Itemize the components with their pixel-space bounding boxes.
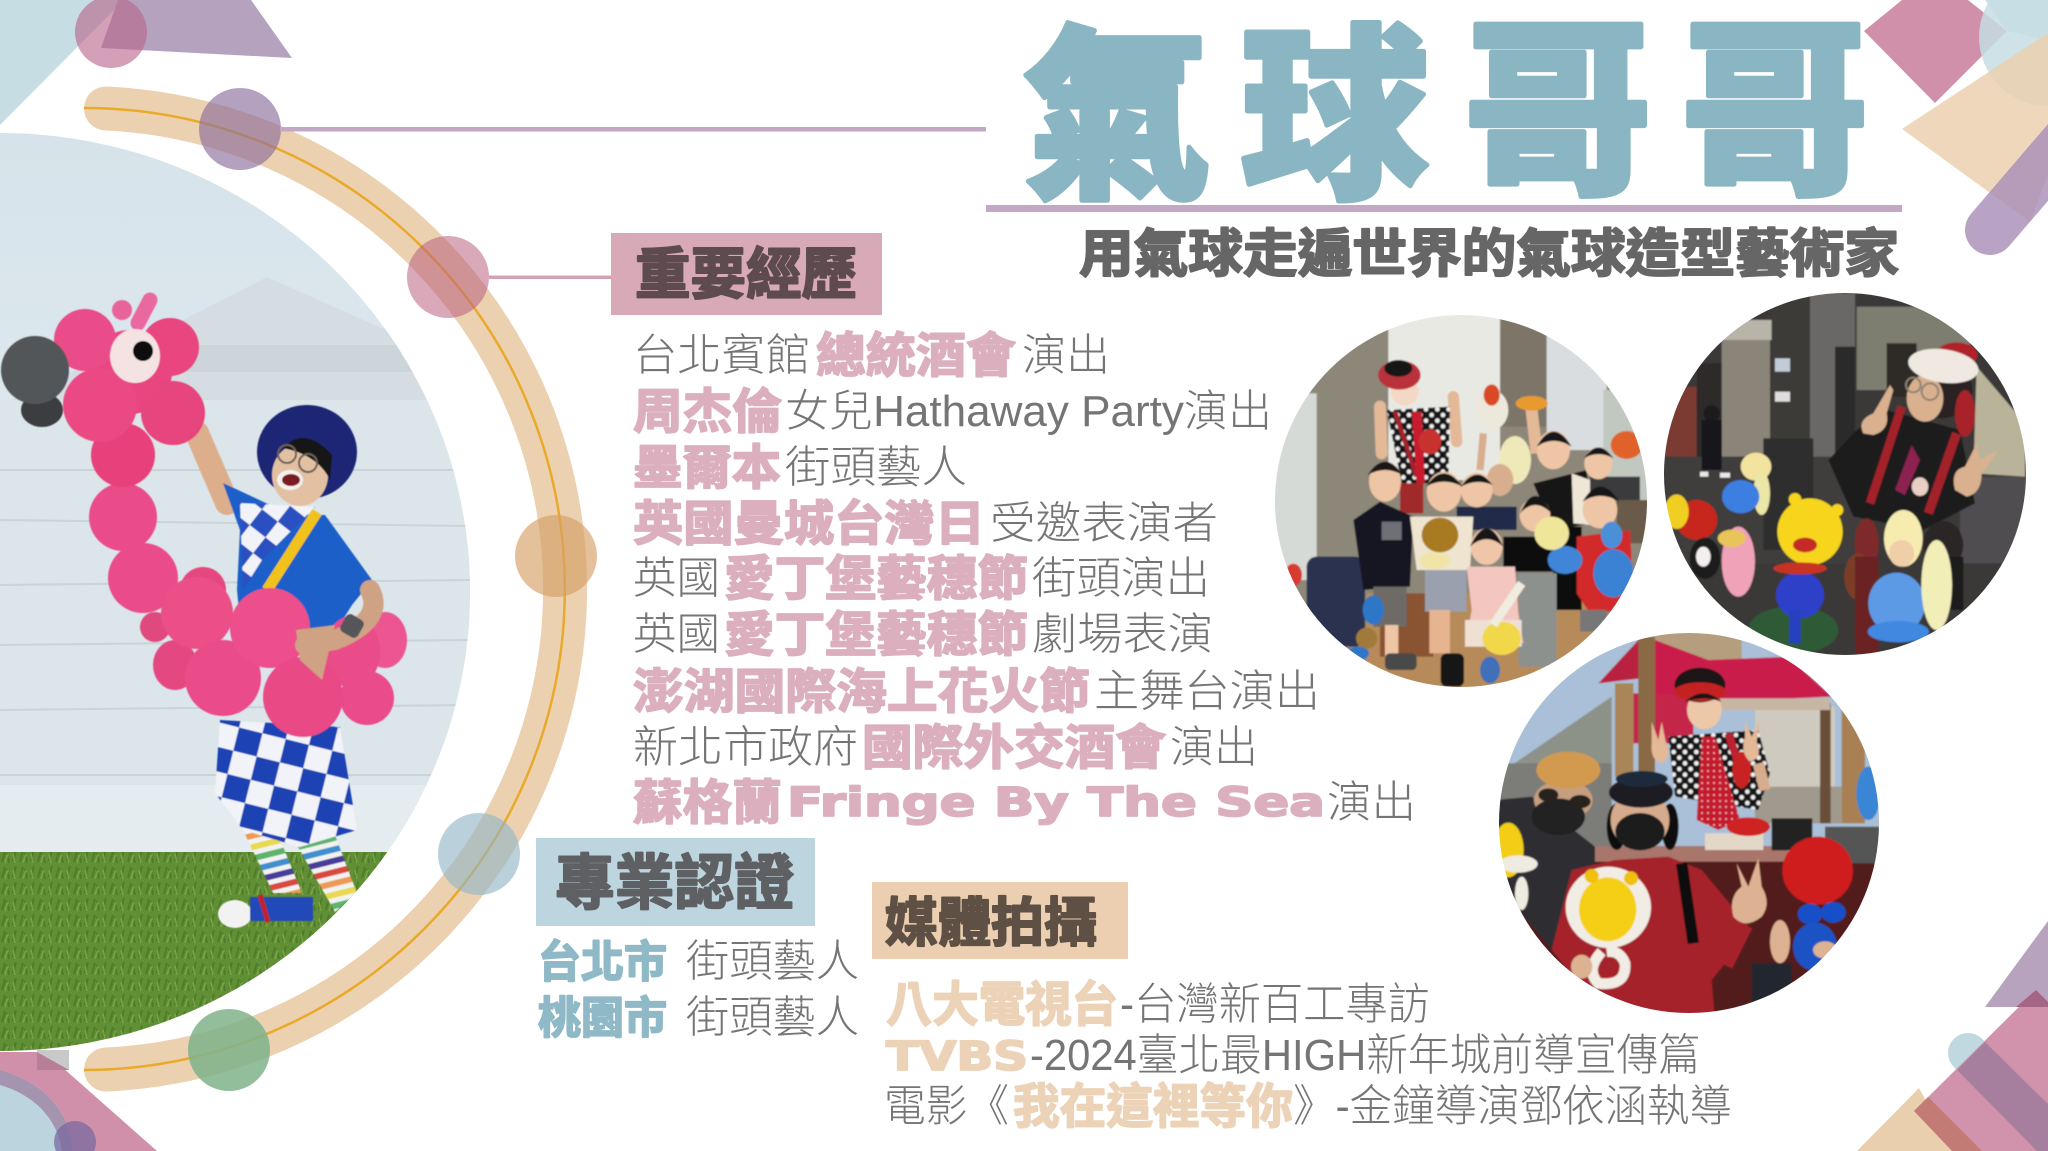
grass: [0, 852, 388, 1051]
title: 哥: [1681, 9, 1869, 219]
cert line 2: 街頭藝人: [686, 993, 859, 1042]
title: [1023, 9, 1869, 223]
performer: [1828, 410, 1975, 530]
line 5: 愛丁堡藝穗節: [724, 553, 1028, 606]
photo: santa hat performer at night: [1660, 290, 2030, 660]
line 8: 新北市政府: [633, 723, 858, 772]
timeline dot: purple: [199, 88, 281, 170]
line 1: [633, 330, 1110, 383]
title underline: [986, 205, 1902, 212]
balloons: [1676, 500, 1717, 540]
line 9: 演出: [1327, 778, 1416, 827]
blue shirt: [223, 483, 372, 640]
timeline dot: blue: [438, 813, 520, 895]
media line 3: 》-金鐘導演鄧依涵執導: [1293, 1082, 1732, 1131]
peace hands: [1861, 385, 1893, 435]
line 9: 蘇格蘭: [633, 777, 782, 830]
title: 氣: [1023, 13, 1211, 223]
kid with black top: [1503, 537, 1553, 572]
pedestrian: [1704, 406, 1720, 420]
decoration: bottom-left shapes: [0, 1050, 157, 1151]
photo: group with children: [1270, 310, 1652, 693]
certification list: [538, 937, 859, 1043]
heading: key experience: 重要經歷: [635, 243, 857, 306]
balloon figures upper: [1482, 392, 1510, 428]
line 6: [633, 609, 1213, 662]
dark umbrella: [1854, 517, 1880, 558]
heading: key experience: [611, 233, 882, 315]
media list: [884, 979, 1732, 1134]
line 9: Fringe By The Sea: [787, 780, 1325, 826]
line 6: 英國: [633, 610, 720, 659]
kid right: [1577, 530, 1632, 613]
line 8: 演出: [1170, 723, 1258, 772]
heading: professional certification: 專業認證: [555, 850, 794, 917]
timeline dot: pink: [407, 236, 489, 318]
heading: media: 媒體拍攝: [885, 894, 1097, 953]
suspender: [267, 512, 317, 590]
cert line 2: [538, 993, 859, 1043]
tent roof: [12, 278, 427, 400]
line 4: 受邀表演者: [990, 499, 1218, 548]
kid in raglan: [1533, 470, 1592, 530]
yellow balloon left: [1493, 823, 1524, 877]
girl: [1465, 567, 1523, 647]
back kids: [1480, 433, 1483, 470]
cert line 1: 台北市: [538, 938, 667, 987]
line 1: 總統酒會: [816, 330, 1016, 383]
line 3: [633, 442, 967, 495]
line 7: 澎湖國際海上花火節: [633, 666, 1090, 719]
peace hand: [1732, 858, 1767, 923]
cert line 1: [538, 937, 859, 987]
connector line to experience heading: [489, 276, 612, 279]
photo: balloon artist with pink balloon animal: [0, 130, 480, 1062]
media line 3: 電影《: [884, 1082, 1009, 1131]
line 1: 台北賓館: [633, 331, 810, 380]
balloon head: [1, 300, 205, 445]
media line 1: 八大電視台: [886, 979, 1118, 1032]
child head: [1924, 521, 1964, 558]
heading: media: [872, 882, 1128, 959]
legs and shoes: [243, 827, 302, 893]
timeline dot: green: [188, 1009, 270, 1091]
line 8: 國際外交酒會: [862, 722, 1166, 775]
media line 1: -台灣新百工專訪: [1120, 980, 1430, 1029]
title: 球: [1241, 13, 1429, 223]
decoration: top-left shapes: [0, 0, 292, 125]
line 4: [633, 498, 1218, 551]
kid 2: [1410, 517, 1473, 570]
media line 1: [886, 979, 1430, 1032]
hat and face: [257, 405, 357, 499]
media line 3: [884, 1081, 1732, 1134]
box pillar: [1763, 438, 1813, 550]
hand and watch: [305, 590, 373, 645]
line 9: [633, 777, 1416, 830]
line 3: 街頭藝人: [785, 443, 967, 492]
line 7: [633, 666, 1320, 719]
cert line 2: 桃園市: [538, 994, 667, 1043]
center woman: [1552, 857, 1752, 1020]
kid 1: [1353, 502, 1413, 590]
line 5: 街頭演出: [1032, 554, 1210, 603]
subtitle: 用氣球走遍世界的氣球造型藝術家: [1079, 226, 1899, 284]
white sheet backdrop: [0, 480, 470, 785]
performer: [1668, 730, 1770, 810]
line 8: [633, 722, 1258, 775]
arm raised: [197, 433, 227, 503]
green jacket: [1748, 606, 1838, 654]
heading: professional certification: [536, 838, 815, 926]
line 6: 愛丁堡藝穗節: [724, 609, 1028, 662]
scarf: [240, 503, 315, 590]
decoration: top-right shapes: [1864, 0, 2048, 230]
photo: fans with masks and performer at booth: [1493, 630, 1885, 1020]
table: [1513, 860, 1875, 1012]
cert line 1: 街頭藝人: [686, 937, 859, 986]
line 2: 周杰倫: [633, 386, 782, 439]
clown adult: [1380, 407, 1382, 453]
media line 2: TVBS: [886, 1034, 1028, 1080]
timeline dot: tan: [515, 515, 597, 597]
line 5: 英國: [633, 554, 720, 603]
line 5: [633, 553, 1210, 606]
pink balloon body: [89, 423, 407, 737]
balloons: [1482, 622, 1521, 655]
line 2: 女兒Hathaway Party演出: [785, 387, 1272, 436]
line 7: 主舞台演出: [1094, 667, 1320, 716]
red and blue balloons: [1782, 837, 1853, 905]
left woman: [1495, 797, 1595, 953]
title: 哥: [1464, 9, 1652, 219]
experience list: [633, 330, 1416, 830]
line 6: 劇場表演: [1032, 610, 1213, 659]
decoration: bottom-right shapes: [1857, 921, 2048, 1151]
line 4: 英國曼城台灣日: [633, 498, 985, 551]
media line 3: 我在這裡等你: [1013, 1081, 1293, 1134]
line 1: 演出: [1022, 331, 1110, 380]
orange arc band: [84, 108, 565, 1070]
checkered shorts: [215, 720, 357, 847]
winnie balloon: [1566, 867, 1651, 948]
line 3: 墨爾本: [633, 442, 781, 495]
media line 2: -2024臺北最HIGH新年城前導宣傳篇: [1030, 1031, 1700, 1080]
connector line to title: [280, 127, 986, 132]
